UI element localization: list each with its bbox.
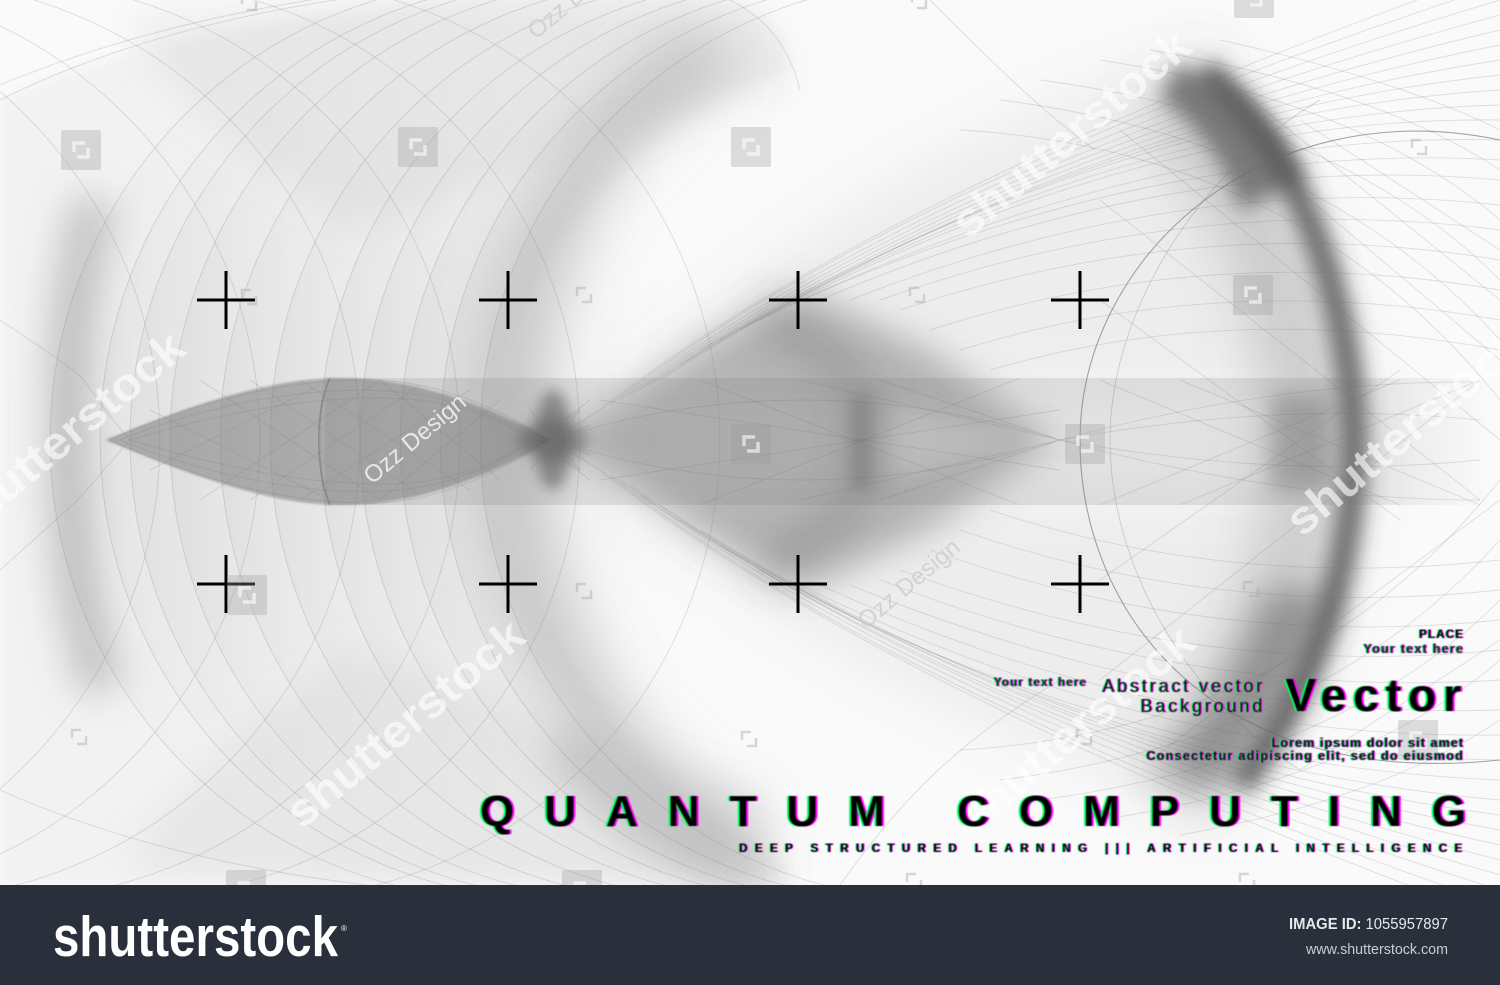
subtitle: abstract vector background [1100, 676, 1265, 717]
body text: consectetur: Consectetur adipiscing elit, sed do eiusmod [1146, 749, 1464, 763]
body text: lorem ipsum: Lorem ipsum dolor sit amet [1271, 736, 1464, 750]
main title: quantum computing: QUANTUM COMPUTING [480, 787, 1496, 836]
footer image id: IMAGE ID: 1055957897 [1289, 916, 1448, 933]
soft grey shading: right crescent [1155, 65, 1354, 790]
subtitle: abstract vector background: Background [1140, 696, 1265, 716]
footer logo: ® [341, 924, 347, 933]
stock watermark text: shutterstock [941, 18, 1201, 248]
tagline: DEEP STRUCTURED LEARNING ||| ARTIFICIAL INTELLIGENCE [739, 843, 1469, 855]
horizontal band [325, 378, 1490, 505]
label: your text here, left: Your text here [994, 677, 1087, 689]
stock watermark text: shutterstock [945, 614, 1205, 844]
footer bar [0, 885, 1500, 985]
subtitle: abstract vector background: Abstract vector [1102, 676, 1265, 696]
soft grey shading: central diamond [560, 290, 1055, 590]
large circle on the right [319, 100, 1500, 770]
heading: vector: Vector [1285, 669, 1468, 721]
soft grey shading: left wave sheets [0, 0, 790, 885]
registration crosses [197, 271, 1109, 613]
fine curve mesh [0, 0, 1095, 900]
label: your text here, top: Your text here [1363, 642, 1464, 656]
stock watermark text: shutterstock [275, 608, 535, 838]
lens shape [105, 378, 552, 505]
overlapping arc sheets [50, 0, 940, 900]
label: place: PLACE [1419, 629, 1464, 641]
soft grey shading: fan wedges [620, 50, 1300, 800]
dark knot [517, 390, 589, 490]
footer logo: shutterstock [53, 905, 338, 969]
footer url: www.shutterstock.com [1305, 941, 1448, 958]
stock watermark text: Ozz Design [359, 389, 472, 490]
stock watermark text: Ozz Design [853, 534, 966, 635]
upper and lower fan lines [552, 0, 1500, 920]
